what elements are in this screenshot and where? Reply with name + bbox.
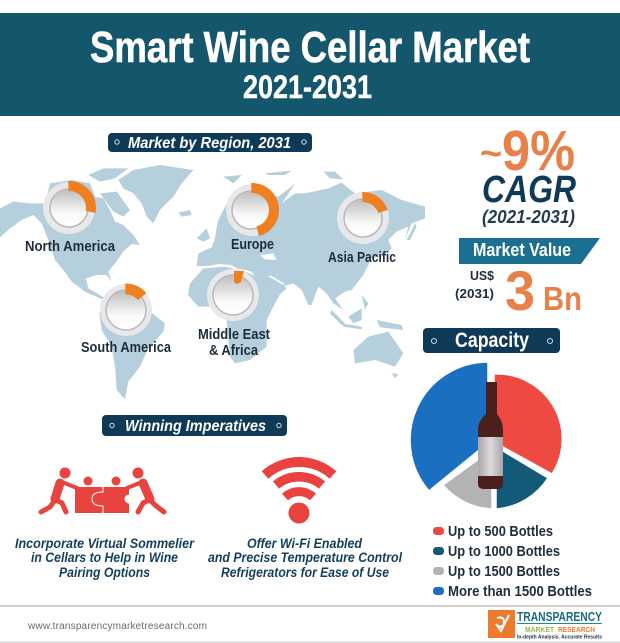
legend item: more than 1500: More than 1500 Bottles <box>448 583 592 600</box>
text: sommelier imperative: Pairing Options <box>59 565 150 580</box>
icon: wi-fi <box>265 462 333 524</box>
stat: market value: 3 <box>505 259 535 322</box>
region dial: North America <box>25 182 116 255</box>
heading: winning imperatives: Winning Imperatives <box>125 418 266 435</box>
subtitle years: 2021-2031 <box>243 69 372 105</box>
stat: CAGR: ~ <box>480 133 502 175</box>
region dial: Middle East and Africa <box>198 269 270 359</box>
text: sommelier imperative <box>15 536 195 580</box>
footer url: www.transparencymarketresearch.com <box>27 621 207 632</box>
region dial: South America <box>81 284 172 356</box>
region dial: Asia Pacific: Asia Pacific <box>328 249 396 266</box>
stat: market value: Bn <box>543 280 582 317</box>
title banner <box>0 13 620 116</box>
heading: capacity: Capacity <box>455 329 529 352</box>
text: sommelier imperative: in Cellars to Help in Wine <box>31 550 178 565</box>
logo: Transparency Market Research: In-depth Analysis. Accurate Results <box>517 634 602 640</box>
icon: wine bottle <box>478 382 503 489</box>
legend: capacity <box>433 523 592 600</box>
text: wi-fi imperative <box>208 536 402 580</box>
text: wi-fi imperative: and Precise Temperature Control <box>208 550 402 565</box>
stat: CAGR: CAGR <box>482 169 576 211</box>
world map <box>0 165 425 399</box>
stat: market value: Market Value <box>473 240 571 260</box>
heading: market by region: Market by Region, 2031 <box>128 135 291 152</box>
stat: market value: (2031) <box>455 286 494 301</box>
region dial: Europe <box>226 184 278 253</box>
logo: Transparency Market Research <box>488 609 602 640</box>
stat: market value <box>455 238 600 322</box>
stat: CAGR: (2021-2031) <box>482 207 575 227</box>
legend item: up to 1500: Up to 1500 Bottles <box>448 563 560 580</box>
stat: market value: US$ <box>470 268 495 283</box>
logo: Transparency Market Research: MARKET <box>525 625 554 634</box>
title: Smart Wine Cellar Market <box>90 23 530 72</box>
region dial: South America: South America <box>81 339 172 356</box>
region dial: Europe: Europe <box>231 236 274 253</box>
legend item: up to 500: Up to 500 Bottles <box>448 523 553 540</box>
text: wi-fi imperative: Offer Wi-Fi Enabled <box>247 536 363 551</box>
heading: capacity <box>423 328 560 353</box>
stat: CAGR <box>480 119 576 227</box>
region dial: Middle East and Africa: & Africa <box>209 342 259 359</box>
heading: winning imperatives <box>102 415 287 436</box>
pie chart: capacity <box>410 362 562 509</box>
region dial: Middle East and Africa: Middle East <box>198 326 270 343</box>
region dial: North America: North America <box>25 238 116 255</box>
stat: CAGR: 9% <box>502 119 575 183</box>
region dial: Asia Pacific <box>328 192 396 266</box>
legend item: up to 1000: Up to 1000 Bottles <box>448 543 560 560</box>
text: sommelier imperative: Incorporate Virtual Sommelier <box>15 536 195 551</box>
logo: Transparency Market Research: RESEARCH <box>558 625 595 634</box>
icon: people joining puzzle <box>41 468 164 513</box>
text: wi-fi imperative: Refrigerators for Ease of Use <box>221 565 389 580</box>
